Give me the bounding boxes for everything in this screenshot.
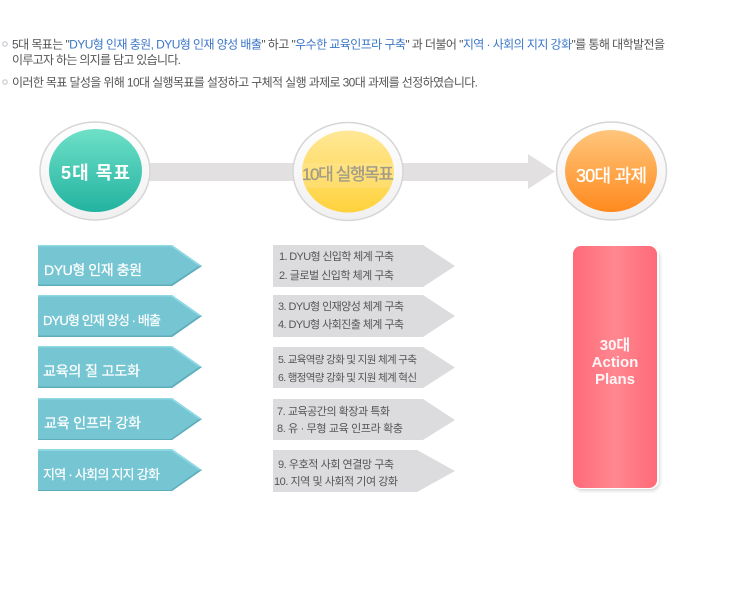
goal chevron 2	[38, 295, 202, 337]
bullet: first paragraph	[3, 42, 7, 46]
circle: 5 goals: 5대 목표	[61, 163, 130, 183]
goal chevron 4	[38, 398, 202, 440]
circle: 10 action goals	[293, 122, 403, 220]
paragraph 1 line 2: 이루고자 하는 의지를 담고 있습니다.	[12, 53, 181, 67]
goal chevron 3: 교육의 질 고도화	[43, 363, 140, 379]
circle: 10 action goals: 10대 실행목표	[302, 165, 394, 184]
action chevron 3: 6. 행정역량 강화 및 지원 체계 혁신	[278, 372, 417, 384]
action chevron 5	[273, 450, 455, 492]
goal chevron 2: DYU형 인재 양성 · 배출	[43, 313, 161, 328]
goal chevron 1	[38, 245, 202, 286]
circle: 5 goals	[40, 122, 150, 220]
action chevron 1	[273, 245, 455, 287]
action chevron 4	[273, 399, 455, 440]
arrow: connecting goals to tasks	[149, 154, 555, 189]
panel: 30 action plans: Plans	[595, 371, 635, 388]
action chevron 2: 4. DYU형 사회진출 체계 구축	[278, 318, 404, 331]
action chevron 4: 7. 교육공간의 확장과 특화	[277, 405, 390, 418]
goal chevron 5: 지역 · 사회의 지지 강화	[43, 467, 160, 482]
action chevron 1: 2. 글로벌 신입학 체계 구축	[279, 269, 394, 282]
action chevron 4: 8. 유 · 무형 교육 인프라 확충	[277, 422, 403, 435]
bullet: second paragraph	[3, 80, 7, 84]
action chevron 2	[273, 295, 455, 337]
circle: 30 tasks	[556, 122, 666, 220]
panel: 30 action plans: 30대	[600, 337, 630, 354]
panel: 30 action plans: Action	[592, 354, 638, 371]
action chevron 5: 10. 지역 및 사회적 기여 강화	[274, 475, 398, 488]
panel: 30 action plans	[572, 245, 660, 491]
paragraph 1 line 1: 5대 목표는 "DYU형 인재 충원, DYU형 인재 양성 배출" 하고 "우수한 교육인프라 구축" 과 더불어 "지역 · 사회의 지지 강화"를 통해 대학발전을	[12, 38, 665, 52]
goal chevron 4: 교육 인프라 강화	[44, 415, 141, 431]
action chevron 2: 3. DYU형 인재양성 체계 구축	[278, 300, 404, 313]
action chevron 3	[273, 347, 455, 388]
action chevron 5: 9. 우호적 사회 연결망 구축	[278, 458, 394, 471]
goal chevron 5	[38, 449, 202, 491]
intro text block	[3, 38, 665, 90]
action chevron 1: 1. DYU형 신입학 체계 구축	[279, 250, 394, 263]
circle: 30 tasks: 30대 과제	[576, 166, 647, 186]
goal chevron 3	[38, 346, 202, 388]
goal chevron 1: DYU형 인재 충원	[44, 262, 142, 278]
paragraph 2: 이러한 목표 달성을 위해 10대 실행목표를 설정하고 구체적 실행 과제로 30대 과제를 선정하였습니다.	[12, 74, 478, 90]
action chevron 3: 5. 교육역량 강화 및 지원 체계 구축	[278, 354, 417, 366]
